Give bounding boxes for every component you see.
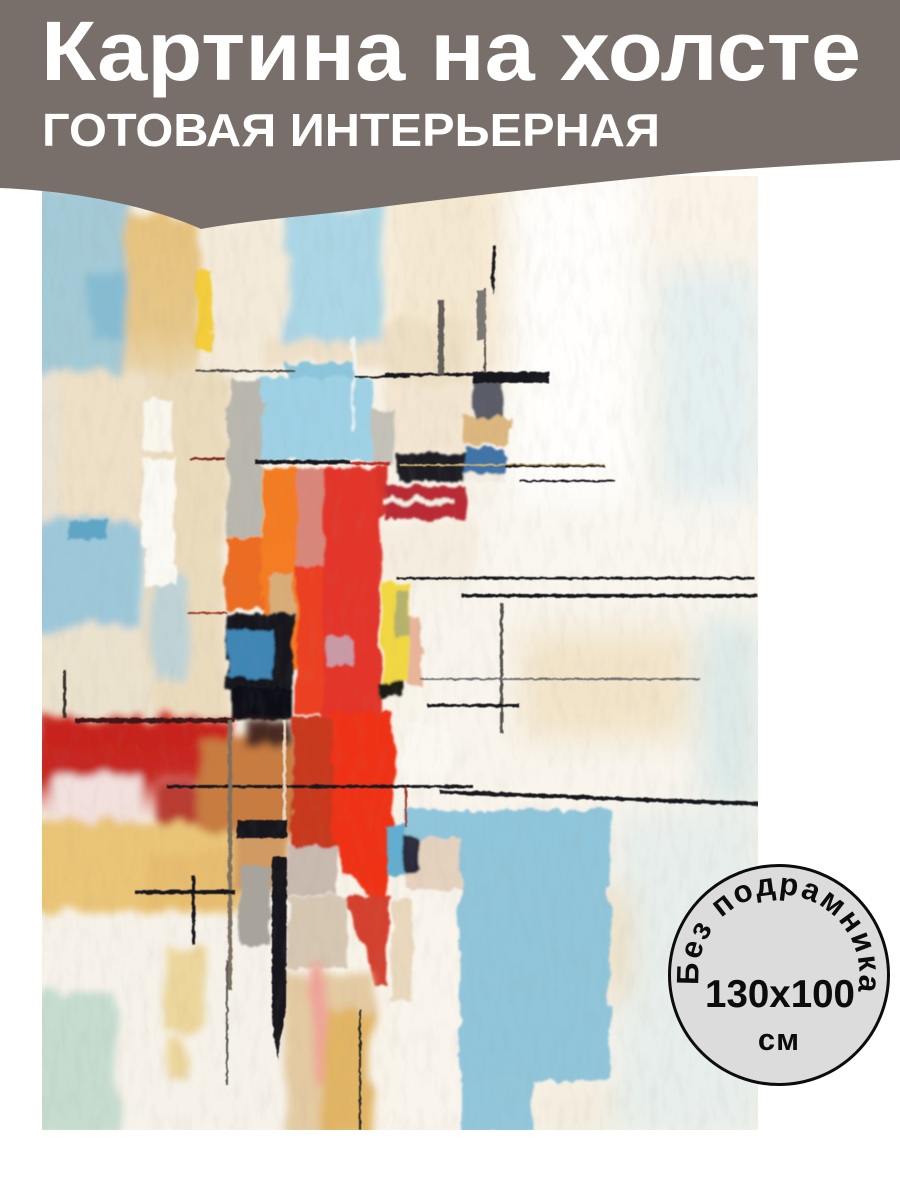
lower blue field — [387, 810, 610, 1133]
subtitle: ГОТОВАЯ ИНТЕРЬЕРНАЯ — [42, 104, 660, 156]
badge: size — [668, 864, 890, 1086]
banner — [0, 0, 900, 229]
badge text: no stretcher: Без подрамника — [676, 878, 876, 992]
badge text: units: см — [758, 1022, 800, 1057]
black brush strokes and scratched lines — [63, 245, 758, 1130]
yellow stripe — [378, 583, 422, 697]
white and yellow accents — [66, 268, 406, 782]
lower red, rust and ochre area — [30, 718, 295, 912]
background washes — [384, 178, 758, 1130]
painting: abstract canvas — [30, 170, 770, 1140]
badge text: dimensions: 130x100 — [705, 973, 855, 1016]
lower red column — [240, 712, 412, 1000]
lower tan and mint fields — [30, 948, 373, 1140]
title: Картина на холсте — [41, 4, 861, 98]
dark red strip and black-blue patches — [226, 375, 510, 720]
left column and top colour fields — [30, 185, 477, 720]
central blue block — [228, 340, 394, 537]
canvas texture overlay — [120, 205, 747, 1122]
central red and orange block — [226, 465, 388, 728]
